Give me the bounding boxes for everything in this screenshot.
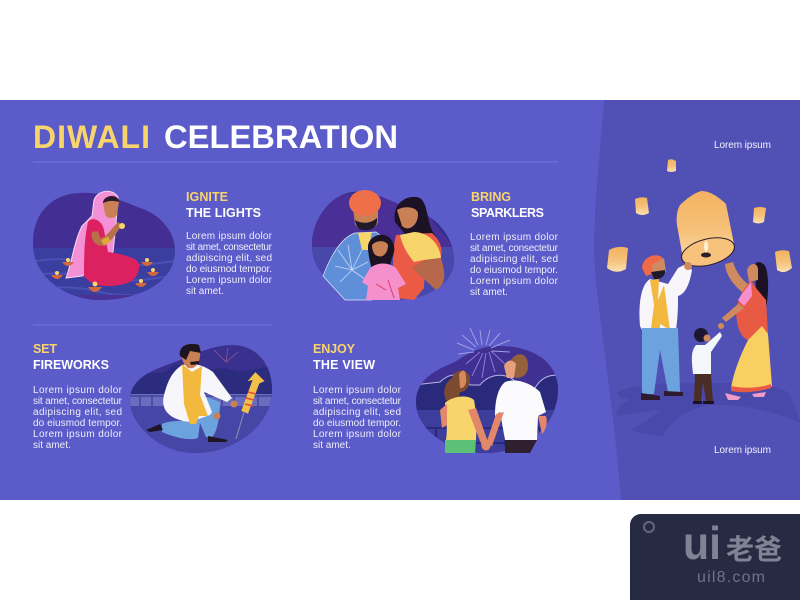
- jeans: [162, 396, 220, 439]
- heading: bring sparklers: BRING: [471, 190, 511, 204]
- text block: adipiscing elit, sed: [33, 407, 122, 418]
- watermark badge: uil8.com: [697, 569, 765, 586]
- woman: [395, 197, 436, 246]
- heading: enjoy the view: [313, 342, 375, 372]
- text block: Lorem ipsum dolor: [186, 231, 273, 242]
- heading: ignite the lights: IGNITE: [186, 190, 228, 204]
- veil: [66, 191, 118, 278]
- watermark badge: [630, 514, 800, 600]
- text block: sit amet.: [470, 287, 508, 298]
- text block: [33, 385, 123, 451]
- text block: Lorem ipsum dolor: [470, 276, 559, 287]
- illustration: family with sparklers: [310, 188, 456, 303]
- heading: bring sparklers: SPARKLERS: [471, 206, 544, 220]
- text block: sit amet, consectetur: [313, 396, 402, 407]
- text block: Lorem ipsum dolor: [313, 429, 402, 440]
- big lantern: [677, 191, 737, 271]
- shoes and hands: [146, 424, 163, 432]
- title: DIWALI: [33, 119, 150, 155]
- text block: sit amet, consectetur: [186, 242, 273, 253]
- heading: ignite the lights: [186, 190, 261, 220]
- panel: ignite the lights: [30, 190, 273, 305]
- title: [33, 119, 398, 155]
- panel: bring sparklers: [310, 188, 559, 303]
- panel: enjoy the view: [313, 328, 560, 455]
- rocket: [241, 371, 265, 415]
- heading: bring sparklers: [471, 190, 544, 220]
- man: [323, 232, 392, 300]
- man: [510, 354, 528, 378]
- diyas: [51, 262, 159, 292]
- watermark badge: 老爸: [726, 528, 782, 568]
- text block: Lorem ipsum dolor: [313, 385, 402, 396]
- text block: sit amet, consectetur: [33, 396, 123, 407]
- man with turban: [639, 255, 692, 400]
- text block: [313, 385, 402, 451]
- head: [181, 344, 200, 368]
- girl: [368, 235, 394, 270]
- label: lorem ipsum top: Lorem ipsum: [714, 140, 771, 151]
- illustration: woman with diyas: [30, 190, 180, 305]
- text block: do eiusmod tempor.: [470, 265, 558, 276]
- text block: Lorem ipsum dolor: [33, 429, 123, 440]
- text block: sit amet.: [33, 440, 71, 451]
- shirt: [163, 364, 232, 422]
- illustration: man lighting a rocket: [128, 343, 274, 455]
- title: CELEBRATION: [164, 119, 398, 155]
- main purple banner: [0, 100, 800, 500]
- text block: adipiscing elit, sed: [470, 254, 558, 265]
- panel: sky lanterns scene: [607, 140, 800, 456]
- heading: set fireworks: [33, 342, 109, 372]
- text block: adipiscing elit, sed: [313, 407, 401, 418]
- text block: [470, 232, 559, 298]
- red dress: [84, 219, 139, 286]
- woman: [444, 370, 470, 405]
- heading: ignite the lights: THE LIGHTS: [186, 206, 261, 220]
- text block: [186, 231, 273, 297]
- text block: adipiscing elit, sed: [186, 253, 272, 264]
- heading: set fireworks: SET: [33, 342, 57, 356]
- text block: do eiusmod tempor.: [313, 418, 401, 429]
- text block: Lorem ipsum dolor: [33, 385, 123, 396]
- firework: [457, 328, 510, 378]
- label: lorem ipsum bottom: Lorem ipsum: [714, 445, 771, 456]
- small lanterns: [607, 159, 792, 272]
- child: [692, 323, 724, 404]
- text block: do eiusmod tempor.: [33, 418, 122, 429]
- heading: set fireworks: FIREWORKS: [33, 358, 109, 372]
- heading: enjoy the view: THE VIEW: [313, 358, 375, 372]
- heading: enjoy the view: ENJOY: [313, 342, 356, 356]
- right side panel: [594, 100, 800, 500]
- panel: set fireworks: [33, 342, 274, 455]
- scarf: [182, 364, 208, 424]
- text block: sit amet, consectetur: [470, 243, 559, 254]
- text block: do eiusmod tempor.: [186, 264, 272, 275]
- woman in sari: [722, 262, 772, 400]
- text block: sit amet.: [186, 286, 224, 297]
- text block: sit amet.: [313, 440, 351, 451]
- arm and bangles: [92, 222, 124, 246]
- face and hair: [103, 196, 119, 218]
- watermark badge: ui: [683, 517, 721, 569]
- ground shadow: [616, 383, 800, 437]
- text block: Lorem ipsum dolor: [186, 275, 273, 286]
- text block: Lorem ipsum dolor: [470, 232, 559, 243]
- illustration: couple watching fireworks: [414, 328, 560, 455]
